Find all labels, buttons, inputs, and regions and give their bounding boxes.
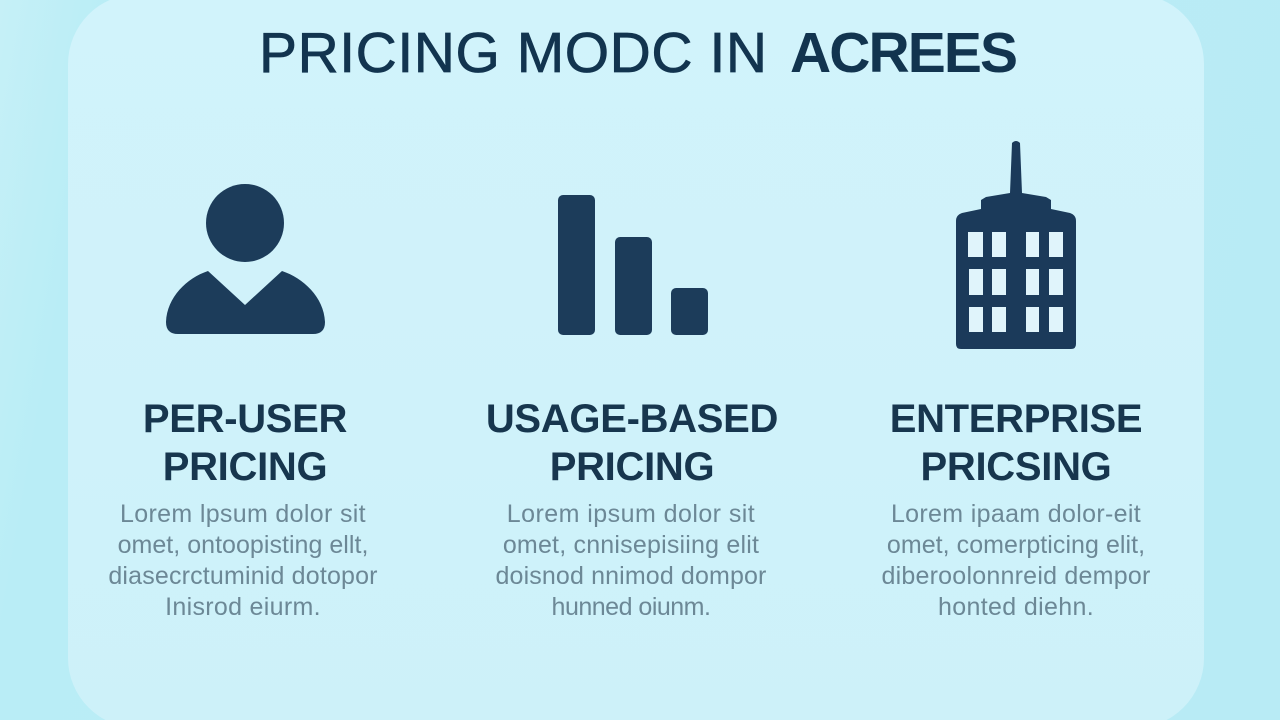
text: usage-based description — [496, 500, 766, 621]
text: usage-based description: doisnod nnimod dompor — [496, 562, 766, 590]
title: PRICING MODC IN — [259, 21, 768, 85]
heading: enterprise pricing: ENTERPRISE — [890, 397, 1142, 441]
heading: per-user pricing: PRICING — [163, 445, 327, 489]
text: per-user description: diasecrctuminid dotopor — [108, 562, 378, 590]
heading: per-user pricing: PER-USER — [143, 397, 347, 441]
text: enterprise description: omet, comerpticing elit, — [887, 531, 1145, 559]
text: per-user description: Lorem lpsum dolor sit — [120, 500, 366, 528]
title — [259, 21, 1016, 85]
text: enterprise description: diberoolonnreid dempor — [881, 562, 1151, 590]
text: per-user description — [108, 500, 378, 621]
text: usage-based description: omet, cnnisepisiing elit — [503, 531, 759, 559]
heading: usage-based pricing: PRICING — [550, 445, 714, 489]
title: ACREES — [790, 21, 1016, 85]
text: per-user description: omet, ontoopisting ellt, — [118, 531, 368, 559]
heading: enterprise pricing — [890, 397, 1142, 489]
text: per-user description: Inisrod eiurm. — [165, 593, 321, 621]
heading: enterprise pricing: PRICSING — [921, 445, 1111, 489]
heading: usage-based pricing — [486, 397, 778, 489]
text: enterprise description: Lorem ipaam dolor-eit — [891, 500, 1141, 528]
text: usage-based description: hunned oiunm. — [552, 593, 710, 621]
text: enterprise description: honted diehn. — [938, 593, 1094, 621]
heading: per-user pricing — [143, 397, 347, 489]
text: enterprise description — [881, 500, 1151, 621]
text: usage-based description: Lorem ipsum dolor sit — [507, 500, 755, 528]
heading: usage-based pricing: USAGE-BASED — [486, 397, 778, 441]
